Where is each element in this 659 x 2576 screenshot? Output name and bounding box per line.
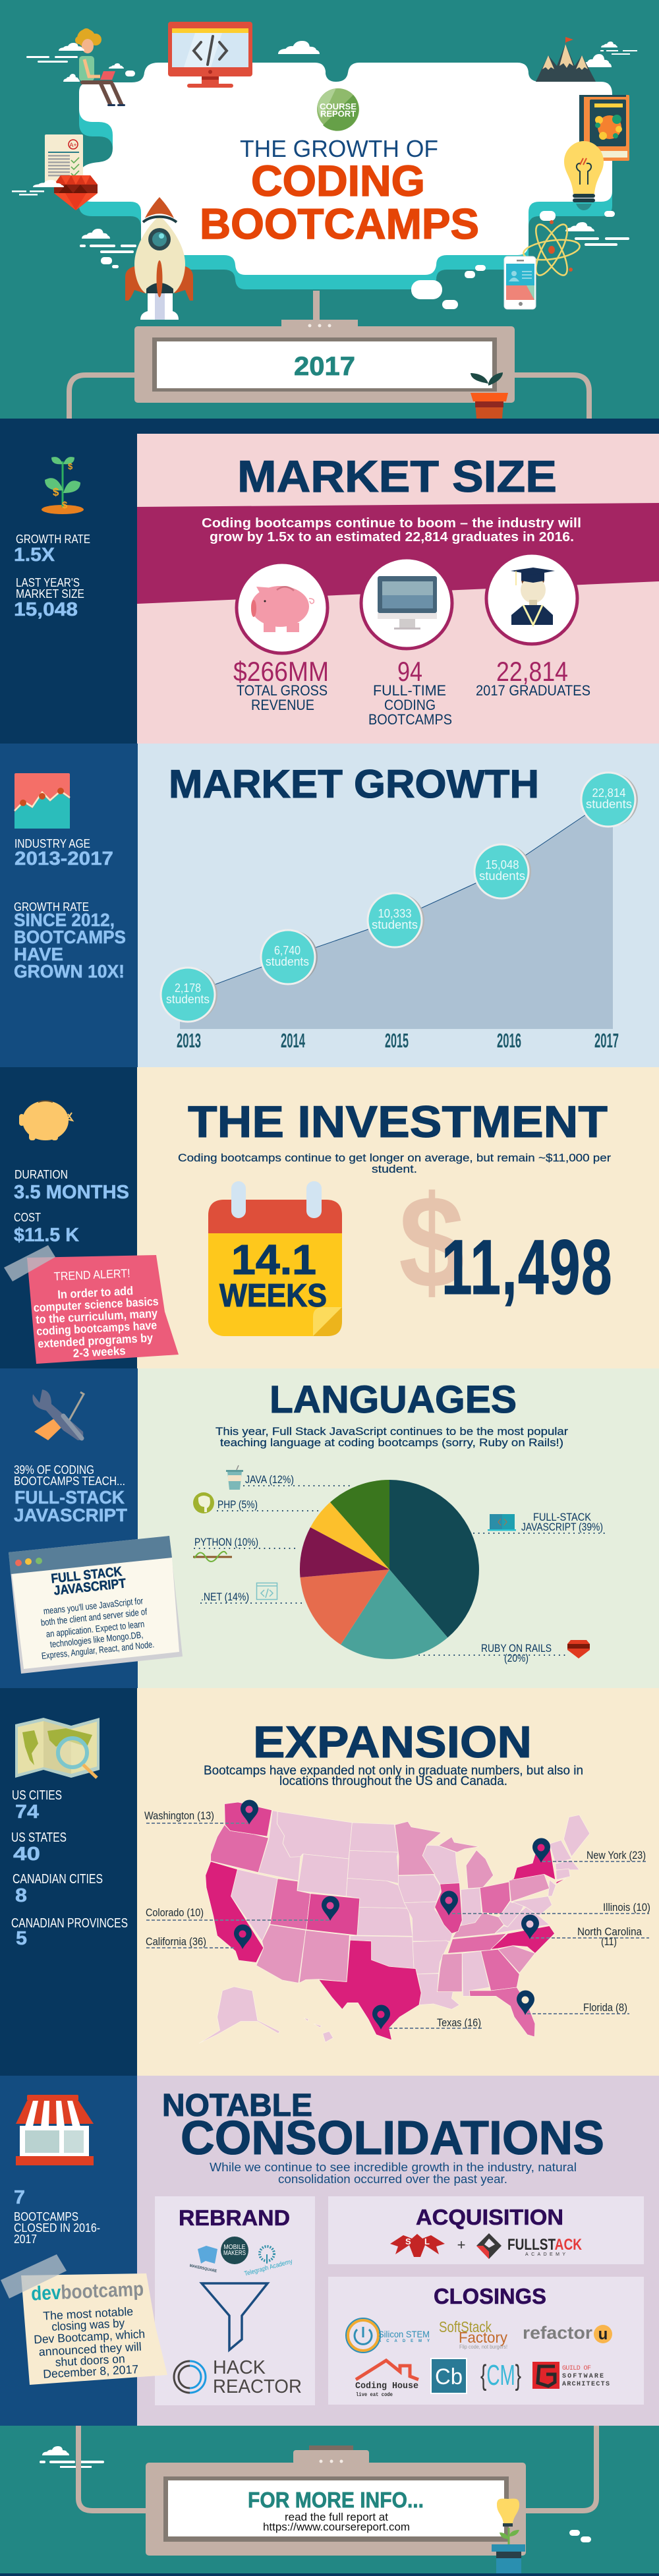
sidebar stats: investment [14,1168,129,1246]
logo: guild of software architects: SOFTWARE [562,2373,604,2380]
sticky note: dev bootcamp: The most notable [43,2304,134,2323]
sidebar stats: market growth: 2013-2017 [14,848,113,869]
sidebar stats: expansion: 74 [15,1801,39,1823]
sidebar stats: market growth: SINCE 2012, [14,910,115,930]
area chart: students [586,798,632,811]
intro text: student. [372,1163,417,1175]
icon: growth chart [14,773,70,829]
logo: hack reactor: HACK [213,2357,266,2378]
intro text [202,516,581,544]
sidebar stats: market growth [14,837,126,981]
intro text: Coding bootcamps continue to get longer on average, but remain ~$11,000 per [178,1152,611,1164]
logo: guild of software architects: ARCHITECTS [562,2381,610,2388]
logo: coding house [355,2360,418,2398]
browser card: full stack javascript: means you'll use JavaScript for [43,1595,144,1616]
icon: book [579,95,629,161]
sticky note: trend alert: In order to add [57,1284,134,1301]
sidebar stats: market size [14,533,90,620]
icon: light bulb [564,141,604,210]
icon: ruby [33,175,98,210]
sidebar stats: investment: COST [14,1211,41,1224]
area chart: 2014 [281,1029,305,1052]
map labels: Florida (8) [583,2001,627,2014]
card: rebrand: REBRAND [179,2206,290,2230]
sidebar stats: market growth: GROWTH RATE [14,900,89,914]
stat: 2017 graduates [476,656,590,699]
map labels: Texas (16) [437,2016,481,2029]
intro text: locations throughout the US and Canada. [279,1774,507,1788]
chart labels: RUBY ON RAILS [481,1642,552,1654]
map labels: North Carolina [577,1925,642,1938]
map labels: Colorado (10) [146,1906,204,1919]
sign: for more info: FOR MORE INFO... [248,2488,424,2512]
panel: the investment [0,1067,659,1368]
sign: for more info [146,2445,526,2556]
logo: softstack factory: Flip code, not burgers! [459,2344,507,2350]
logo: coding house: Coding House [355,2381,418,2391]
logo: course report [317,88,359,131]
icon: graded paper: A+ [69,142,77,148]
browser card: full stack javascript: Express, Angular, React, and Node. [41,1639,155,1661]
icon: ruby small [567,1640,590,1658]
icon: java cup [226,1465,243,1490]
logo: softstack factory: Factory [459,2329,507,2346]
sidebar stats: market size: 1.5X [14,544,55,566]
stat: 2017 graduates: 22,814 [496,656,568,687]
area chart: 22,814 [592,786,626,800]
icon: money plant [42,457,84,514]
chart labels: PHP (5%) [217,1498,258,1511]
icon: person with laptop [59,28,125,106]
icon: storefront [16,2095,94,2165]
sidebar stats: expansion: 8 [15,1885,27,1906]
map labels: (11) [601,1935,617,1948]
card: acquisition: S [405,2237,411,2246]
intro text [178,1152,611,1175]
card: rebrand [155,2196,315,2405]
heading: notable consolidations: CONSOLIDATIONS [181,2112,604,2165]
sidebar stats: market size: 15,048 [14,599,78,620]
intro text [210,2161,577,2186]
browser card: full stack javascript: an application. Expect to learn [45,1618,145,1639]
logo: cm: {CM} [480,2359,521,2391]
icon: money plant: $ [53,486,59,498]
cost: 11,498: $ [399,1169,465,1316]
card: rebrand: MAKERS [223,2250,246,2257]
logo: hack reactor [174,2357,302,2397]
intro text [204,1764,583,1788]
sticky note: trend alert: extended programs by [38,1331,154,1351]
heading: market size: MARKET SIZE [237,452,557,502]
sticky note: trend alert: TREND ALERT! [53,1266,130,1283]
icon: piggy bank [237,562,328,653]
icon: .net code window [257,1583,277,1599]
sidebar stats: market growth: GROWN 10X! [14,961,125,981]
browser card: full stack javascript [9,1536,183,1674]
browser card: full stack javascript: FULL STACK [51,1564,123,1587]
icon: rocket [125,197,193,320]
sidebar stats: expansion: 40 [13,1844,40,1865]
sidebar stats: consolidations: 7 [14,2187,25,2208]
sidebar stats: consolidations: BOOTCAMPS [14,2210,78,2223]
heading: languages: LANGUAGES [270,1378,517,1421]
logo: cb [431,2358,467,2393]
logo: course report: REPORT [320,109,356,119]
area chart: 2017 [594,1029,619,1052]
stat: full-time coding bootcamps: BOOTCAMPS [368,711,452,728]
area chart: 15,048 [485,858,519,871]
panel: footer [0,2426,659,2576]
icon: map with magnifier [15,1718,100,1778]
chart labels: PYTHON (10%) [194,1536,258,1548]
logo: silicon stem academy [346,2318,430,2353]
icon: python snake [193,1552,232,1562]
panel: expansion [0,1688,659,2076]
sidebar stats: consolidations: CLOSED IN 2016- [14,2221,100,2235]
sidebar stats: market growth: HAVE [14,944,63,964]
intro text: teaching language at coding bootcamps (sorry, Ruby on Rails!) [220,1436,563,1449]
logo: softstack factory: SoftStack [439,2318,492,2335]
sidebar stats: market size: GROWTH RATE [16,533,90,546]
panel: market size [0,419,659,744]
area chart: 2013 [177,1029,201,1052]
sidebar stats: languages: FULL-STACK [14,1487,125,1508]
stat: 2017 graduates: 2017 GRADUATES [476,682,590,699]
sidebar stats: expansion: CANADIAN CITIES [13,1872,103,1887]
title: THE GROWTH OF [240,135,438,162]
title: BOOTCAMPS [200,200,479,248]
calendar: 14.1 weeks: 14.1 [231,1236,316,1283]
icon: mountains [536,37,596,82]
logo: refactor u: refactor [523,2323,593,2343]
card: acquisition: + [457,2237,465,2253]
logo: coding house: live eat code [356,2392,393,2398]
year sign [69,291,589,419]
chart labels [194,1473,604,1664]
sidebar stats: market size: MARKET SIZE [16,587,84,600]
stat: total gross revenue [233,656,329,713]
map labels: Illinois (10) [603,1901,650,1914]
card: acquisition: ACADEMY [525,2252,565,2257]
panel: header [0,0,659,419]
chart labels: FULL-STACK [533,1511,592,1523]
logo: silicon stem academy: ACADEMY [378,2339,430,2343]
browser card: full stack javascript: technologies like Mongo.DB, [49,1629,144,1649]
sidebar stats: market growth: INDUSTRY AGE [14,837,90,850]
stat: total gross revenue: TOTAL GROSS [237,682,328,699]
sidebar stats: consolidations: 2017 [14,2233,37,2246]
logo: refactor u: u [598,2326,608,2343]
sticky note: trend alert: 2-3 weeks [72,1344,126,1360]
sidebar stats: market size: LAST YEAR'S [16,576,80,589]
logo: silicon stem academy: Silicon STEM [378,2329,430,2339]
sticky note: dev bootcamp: Dev Bootcamp, which [34,2327,146,2346]
sticky note: trend alert: coding bootcamps have [36,1318,158,1338]
sidebar stats: expansion: US CITIES [12,1788,62,1803]
pie chart [300,1480,479,1659]
stat: full-time coding bootcamps: CODING [384,697,436,713]
intro text: This year, Full Stack JavaScript continues to be the most popular [215,1425,568,1438]
stat: full-time coding bootcamps: 94 [397,656,422,687]
sticky note: dev bootcamp: December 8, 2017 [43,2362,139,2381]
sidebar stats: expansion [11,1788,128,1949]
sidebar stats: expansion: CANADIAN PROVINCES [11,1916,128,1931]
icon: monitor [361,558,452,649]
sign: for more info: https://www.coursereport.com [263,2521,410,2533]
intro text: consolidation occurred over the past year. [278,2173,507,2186]
sticky note: dev bootcamp: devbootcamp [30,2278,144,2305]
sidebar stats: expansion: 5 [16,1928,27,1949]
icon: code monitor [168,22,252,88]
title [200,135,479,248]
sticky note: dev bootcamp: shut doors on [55,2352,125,2369]
year sign: 2017 [294,352,355,381]
logo: hack reactor: REACTOR [213,2376,302,2397]
icon: bulb plant [492,2499,525,2573]
icon: atom [522,220,581,279]
sidebar stats: investment: DURATION [14,1168,68,1181]
map pins [234,1800,550,2030]
stat: full-time coding bootcamps: FULL-TIME [373,682,446,699]
map labels: California (36) [146,1935,206,1948]
icon: graded paper [45,134,83,186]
intro text [215,1425,568,1449]
sidebar stats: investment: 3.5 MONTHS [14,1182,129,1203]
heading: notable consolidations [162,2088,604,2165]
icon: graduate [486,553,577,644]
sidebar stats: languages [14,1463,127,1525]
card: closings: CLOSINGS [434,2284,546,2308]
chart labels: .NET (14%) [201,1591,249,1603]
card: acquisition: FULLSTACK [507,2236,583,2254]
stat: total gross revenue: REVENUE [251,697,314,713]
map labels [144,1809,650,2029]
map labels: New York (23) [587,1849,646,1861]
sticky note: trend alert [4,1245,179,1364]
heading: expansion: EXPANSION [253,1717,532,1767]
stat: total gross revenue: $266MM [233,656,329,687]
sidebar stats: consolidations [14,2187,100,2246]
heading: notable consolidations: NOTABLE [162,2088,312,2123]
area chart: 10,333 [378,907,411,920]
logo: course report: COURSE [320,102,357,111]
cost: 11,498 [399,1169,613,1316]
calendar: 14.1 weeks [208,1181,342,1336]
area chart: students [266,955,309,968]
intro text: Bootcamps have expanded not only in graduate numbers, but also in [204,1764,583,1778]
chart labels: (20%) [504,1652,529,1664]
sticky note: dev bootcamp: announced they will [38,2340,142,2358]
logo: guild of software architects: GUILD OF [562,2365,591,2372]
calendar: 14.1 weeks: WEEKS [219,1278,327,1314]
map labels: Washington (13) [144,1809,214,1822]
chart labels: JAVASCRIPT (39%) [521,1521,603,1533]
card: rebrand: Telegraph Academy [244,2258,293,2278]
icon: phone [504,256,536,309]
title: CODING [251,156,425,205]
chart labels: JAVA (12%) [245,1473,294,1486]
panel: notable consolidations [0,2076,659,2426]
area chart: 2,178 [175,981,201,995]
icon: money plant: $ [68,461,73,471]
area chart: 6,740 [274,944,301,957]
sticky note: dev bootcamp [1,2254,167,2385]
sidebar stats: languages: JAVASCRIPT [14,1505,127,1525]
sticky note: trend alert: to the curriculum, many [36,1306,158,1326]
icon: php elephant [193,1492,214,1513]
sticky note: dev bootcamp: closing was by [51,2316,125,2333]
sign: for more info: read the full report at [285,2511,388,2523]
intro text: grow by 1.5x to an estimated 22,814 graduates in 2016. [210,530,574,544]
intro text: While we continue to see incredible growth in the industry, natural [210,2161,577,2174]
sidebar stats: languages: 39% OF CODING [14,1463,94,1477]
sticky note: trend alert: computer science basics [33,1295,159,1314]
browser card: full stack javascript: both the client and server side of [40,1606,148,1627]
icon: laptop [488,1514,516,1531]
area chart: students [166,993,210,1006]
stat: full-time coding bootcamps [368,656,452,728]
icon: tools [32,1390,84,1440]
icon: money plant: $ [62,500,68,511]
intro text: Coding bootcamps continue to boom – the industry will [202,516,581,531]
card: acquisition: ACQUISITION [416,2205,563,2229]
sidebar stats: investment: $11.5 K [14,1225,79,1246]
logo: cb: Cb [435,2364,463,2389]
panel: market growth [0,744,659,1067]
card: rebrand: MAKERSQUARE [189,2264,217,2273]
map: united states [199,1802,590,2043]
card: rebrand: MOBILE [224,2244,246,2251]
heading: market growth: MARKET GROWTH [169,762,539,806]
panel: languages [0,1368,659,1688]
logo: guild of software architects [532,2362,610,2389]
card: acquisition: L [424,2237,430,2246]
area chart: students [479,869,525,883]
icon: potted plant [471,372,508,419]
area chart: students [372,918,418,931]
icon: funnel [202,2283,268,2350]
icon: piggy bank back [19,1101,72,1140]
card: closings [328,2277,644,2405]
card: acquisition [328,2196,644,2264]
heading: the investment: THE INVESTMENT [188,1097,608,1147]
area chart: 2016 [497,1029,521,1052]
browser card: full stack javascript: JAVASCRIPT [53,1576,127,1598]
area chart: 2015 [385,1029,409,1052]
logo: softstack factory [439,2318,507,2350]
sidebar stats: expansion: US STATES [11,1830,67,1845]
sidebar stats: languages: BOOTCAMPS TEACH... [14,1475,125,1488]
area chart [161,773,638,1052]
sidebar stats: market growth: BOOTCAMPS [14,927,126,947]
